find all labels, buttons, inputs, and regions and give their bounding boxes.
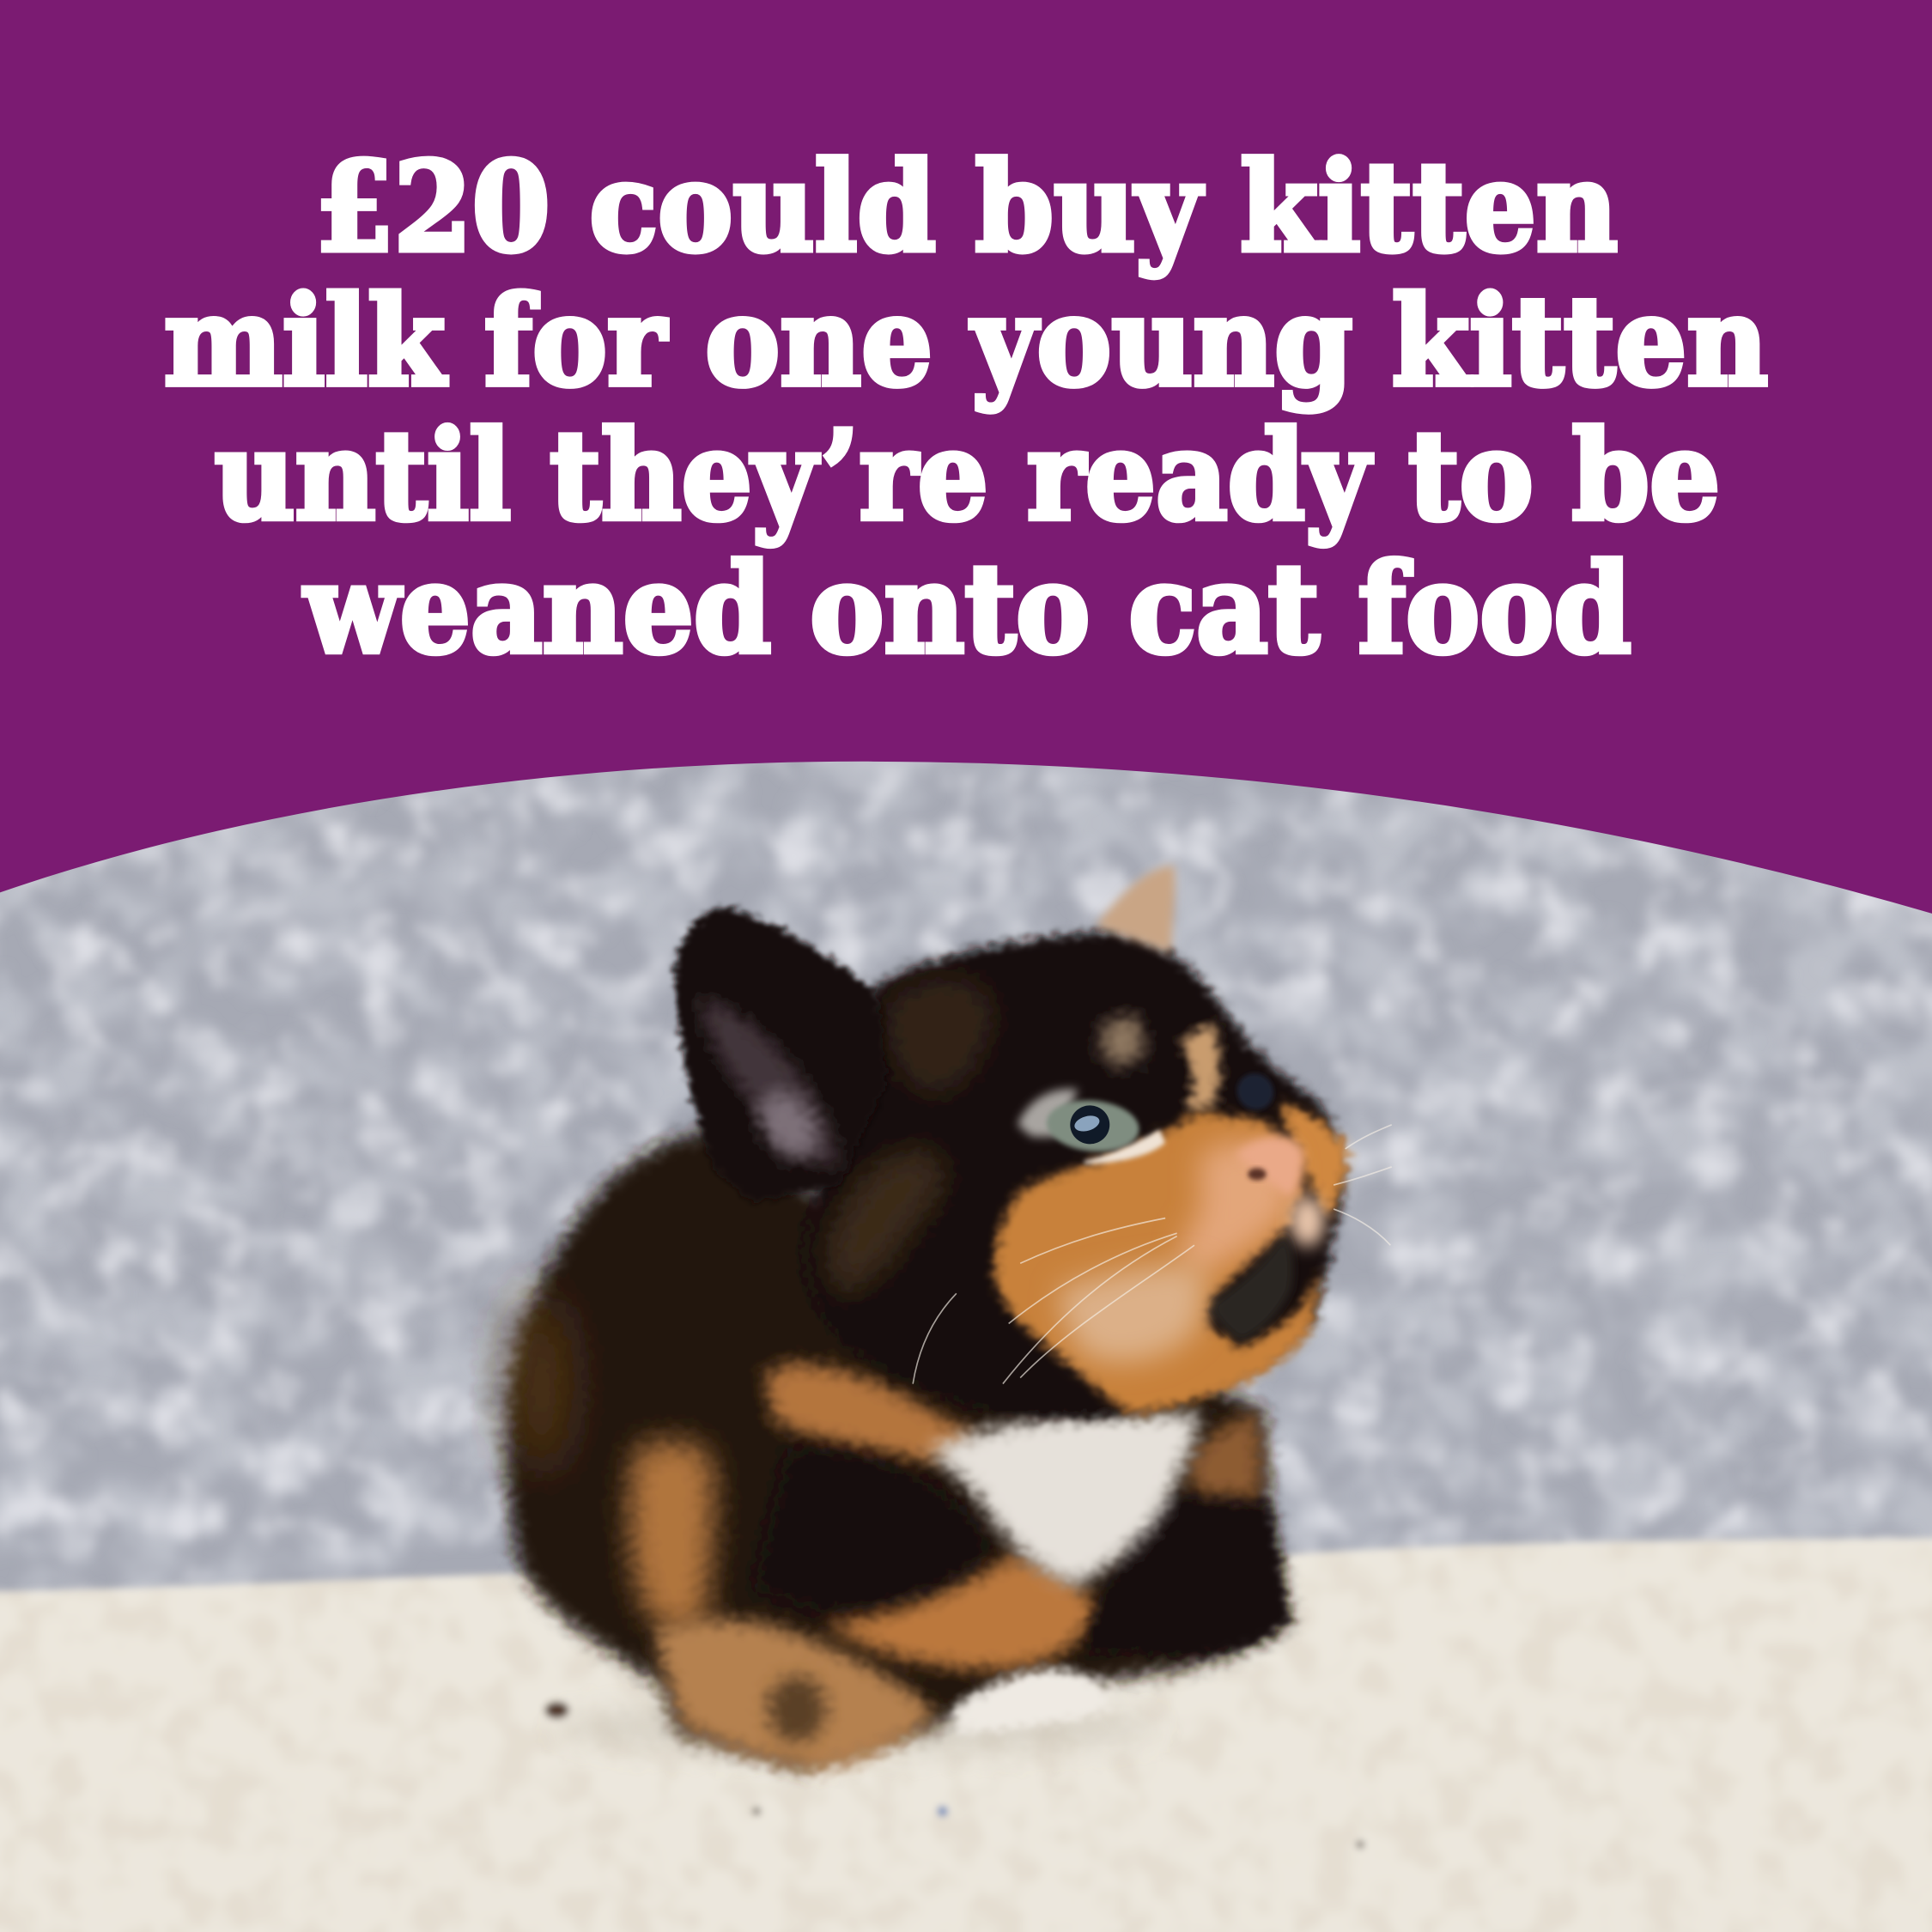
specks on fleece <box>544 1702 569 1719</box>
body silhouette <box>507 1131 1290 1770</box>
tan forehead patches <box>1102 1017 1145 1067</box>
black chest patch <box>753 1448 991 1616</box>
far eye <box>1231 1067 1279 1116</box>
orange neck band <box>765 1364 980 1462</box>
right ear <box>1096 866 1175 953</box>
dark chin <box>1211 1233 1293 1341</box>
body with fur texture <box>507 932 1344 1770</box>
brown head patch upper <box>886 978 992 1095</box>
orange right of nose <box>1279 1103 1348 1218</box>
nose <box>1235 1136 1303 1197</box>
orange right shoulder <box>1190 1414 1261 1497</box>
soft contact shadow <box>556 1703 1159 1752</box>
photo: calico kitten <box>507 866 1392 1770</box>
pale patch beside eye <box>1018 1089 1078 1137</box>
pale mouth side <box>1290 1196 1325 1247</box>
headline: milk for one young kitten <box>164 269 1768 414</box>
whiskers <box>913 1125 1392 1384</box>
pale muzzle <box>1181 1142 1290 1273</box>
white bib <box>927 1414 1200 1586</box>
orange chest band <box>823 1556 1098 1669</box>
brown cheek patch <box>823 1149 945 1294</box>
head dark base <box>803 932 1344 1419</box>
flank orange stripe <box>629 1441 714 1630</box>
left flank brown <box>509 1293 574 1474</box>
headline <box>164 134 1768 681</box>
photo: grey felt backdrop <box>0 739 1932 1651</box>
photo: cream fleece floor <box>0 1528 1932 1932</box>
near eye <box>1044 1097 1141 1156</box>
pale cheek <box>1060 1266 1206 1362</box>
orange face mask <box>994 1103 1348 1414</box>
headline: until they’re ready to be <box>215 403 1720 548</box>
headline: weaned onto cat food <box>303 536 1631 681</box>
white front paw <box>951 1669 1110 1732</box>
purple header with curved lower edge <box>0 0 1932 914</box>
white lower eyelid <box>1084 1129 1165 1163</box>
paw dark mark <box>768 1676 826 1742</box>
black right flank <box>1084 1493 1290 1655</box>
headline: £20 could buy kitten <box>315 134 1618 279</box>
left ear <box>675 908 887 1203</box>
front haunch and paw <box>654 1619 936 1770</box>
